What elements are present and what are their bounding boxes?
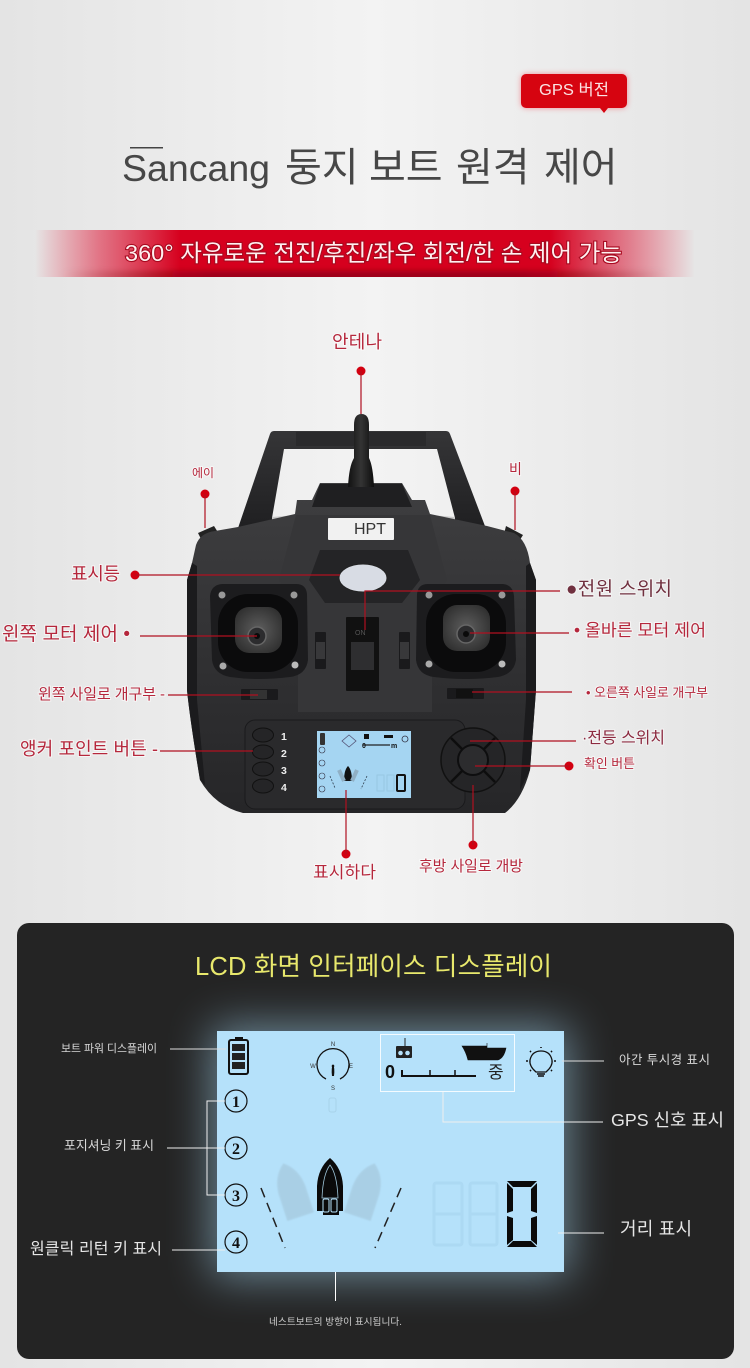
- callout: position keys: [64, 1101, 225, 1195]
- range scale: 중: [488, 1063, 504, 1082]
- number buttons: 1: [281, 731, 287, 743]
- title: 제어: [544, 146, 618, 190]
- icon: compass: N: [331, 1042, 335, 1048]
- callout: A: 에이: [192, 466, 214, 480]
- icon: compass: S: [331, 1086, 335, 1092]
- vertical trims: [315, 632, 410, 669]
- antenna: [348, 414, 374, 487]
- ghost boats: [270, 1159, 388, 1221]
- power switch: [346, 617, 379, 691]
- callout: GPS signal: GPS 신호 표시: [611, 1110, 724, 1130]
- horizontal trims: [241, 688, 484, 700]
- title: 보트: [369, 146, 443, 190]
- callout: one-click return: 원클릭 리턴 키 표시: [30, 1240, 162, 1258]
- icon: bulb: [526, 1047, 556, 1076]
- callout: A: [192, 466, 214, 528]
- lcd screen: [217, 1031, 564, 1272]
- callout: indicator light: 표시등: [71, 564, 120, 584]
- range scale: [385, 1062, 504, 1082]
- side shoulder buttons: [198, 526, 219, 543]
- circled numbers: 2: [232, 1141, 240, 1158]
- circled numbers: 4: [232, 1235, 240, 1252]
- number buttons: 3: [281, 765, 287, 777]
- title: [122, 146, 618, 190]
- label plate HPT: HPT: [354, 521, 386, 538]
- callout: distance: 거리 표시: [620, 1219, 692, 1239]
- circled numbers: [225, 1090, 247, 1253]
- banner: feature subtitle: 360° 자유로운 전진/후진/좌우 회전/한 손 제어 가능: [125, 240, 622, 266]
- lcd glow: [212, 1026, 569, 1277]
- title: 원격: [456, 146, 530, 190]
- center hump: [279, 515, 447, 712]
- callout: power switch: ●전원 스위치: [566, 578, 672, 600]
- d-pad: [441, 728, 505, 792]
- heading: LCD display: LCD 화면 인터페이스 디스플레이: [195, 953, 552, 981]
- GPS signal box: [380, 1034, 514, 1092]
- distance digits: [434, 1181, 537, 1247]
- callout: light switch: ·전등 스위치: [582, 729, 665, 747]
- callout: B: 비: [509, 461, 522, 477]
- right joystick: [426, 592, 506, 672]
- callout: indicator light: [71, 564, 340, 584]
- banner: feature subtitle: [35, 230, 695, 281]
- lower panel: [245, 720, 465, 809]
- small LCD: [317, 731, 411, 798]
- badge: GPS version: [521, 74, 627, 113]
- icon: compass: [310, 1042, 353, 1112]
- left plate: [210, 584, 308, 679]
- small LCD: 0: [362, 743, 366, 750]
- right plate: [416, 584, 516, 679]
- icon: compass: W: [310, 1064, 316, 1070]
- icon: boat: [462, 1043, 506, 1060]
- controller: [187, 414, 536, 813]
- number buttons: 2: [281, 748, 287, 760]
- small LCD: m: [391, 743, 397, 750]
- icon: compass: E: [349, 1064, 353, 1070]
- panel: LCD interface: [17, 923, 734, 1359]
- number buttons: 4: [281, 782, 287, 794]
- callout: display: [313, 790, 376, 882]
- indicator light: [339, 564, 387, 592]
- callout: GPS signal: [443, 1092, 724, 1130]
- callout: display: 표시하다: [313, 863, 376, 882]
- callout: position keys: 포지셔닝 키 표시: [64, 1138, 154, 1153]
- callout: nest boat direction: [269, 1272, 402, 1328]
- callout: nest boat direction: 네스트보트의 방향이 표시됩니다.: [269, 1315, 402, 1328]
- circled numbers: 3: [232, 1188, 240, 1205]
- number buttons: [252, 728, 287, 794]
- callout: distance: [558, 1219, 692, 1239]
- callout: B: [509, 461, 522, 530]
- callout: left bait door: 윈쪽 사일로 개구부 -: [38, 686, 165, 703]
- dashed direction lines: [261, 1188, 401, 1248]
- callout: right motor control: • 올바른 모터 제어: [574, 620, 706, 640]
- callout: boat power: 보트 파워 디스플레이: [61, 1042, 157, 1055]
- title: 둥지: [285, 146, 359, 190]
- callout: confirm button: 확인 버튼: [584, 756, 635, 771]
- callout: night vision: 아간 투시경 표시: [619, 1053, 710, 1067]
- range scale: 0: [385, 1062, 395, 1082]
- callout: antenna: [332, 332, 382, 414]
- left joystick: [218, 592, 298, 672]
- callout: right bait door: • 오른쪽 사일로 개구부: [586, 685, 708, 700]
- circled numbers: 1: [232, 1094, 240, 1111]
- callout: left motor control: 윈쪽 모터 제어 •: [2, 623, 130, 645]
- callout: confirm button: [475, 756, 635, 771]
- power switch: ON: [355, 630, 366, 637]
- side grips: [187, 563, 536, 790]
- badge: GPS version: GPS 버전: [539, 81, 609, 99]
- title: Sancang: [122, 147, 270, 189]
- body: [187, 483, 536, 813]
- callout: rear bait door: [419, 785, 523, 875]
- shoulder strips: [272, 515, 455, 522]
- callout: antenna: 안테나: [332, 332, 382, 352]
- callout: rear bait door: 후방 사일로 개방: [419, 858, 523, 875]
- callout: anchor button: 앵커 포인트 버튼 -: [20, 739, 158, 759]
- boat: [317, 1158, 343, 1215]
- handle: [236, 431, 488, 534]
- icon: remote: [396, 1038, 412, 1058]
- callout: power switch: [365, 578, 672, 630]
- antenna block: [312, 484, 412, 507]
- label plate HPT: [328, 518, 394, 540]
- icon: battery: [229, 1037, 248, 1074]
